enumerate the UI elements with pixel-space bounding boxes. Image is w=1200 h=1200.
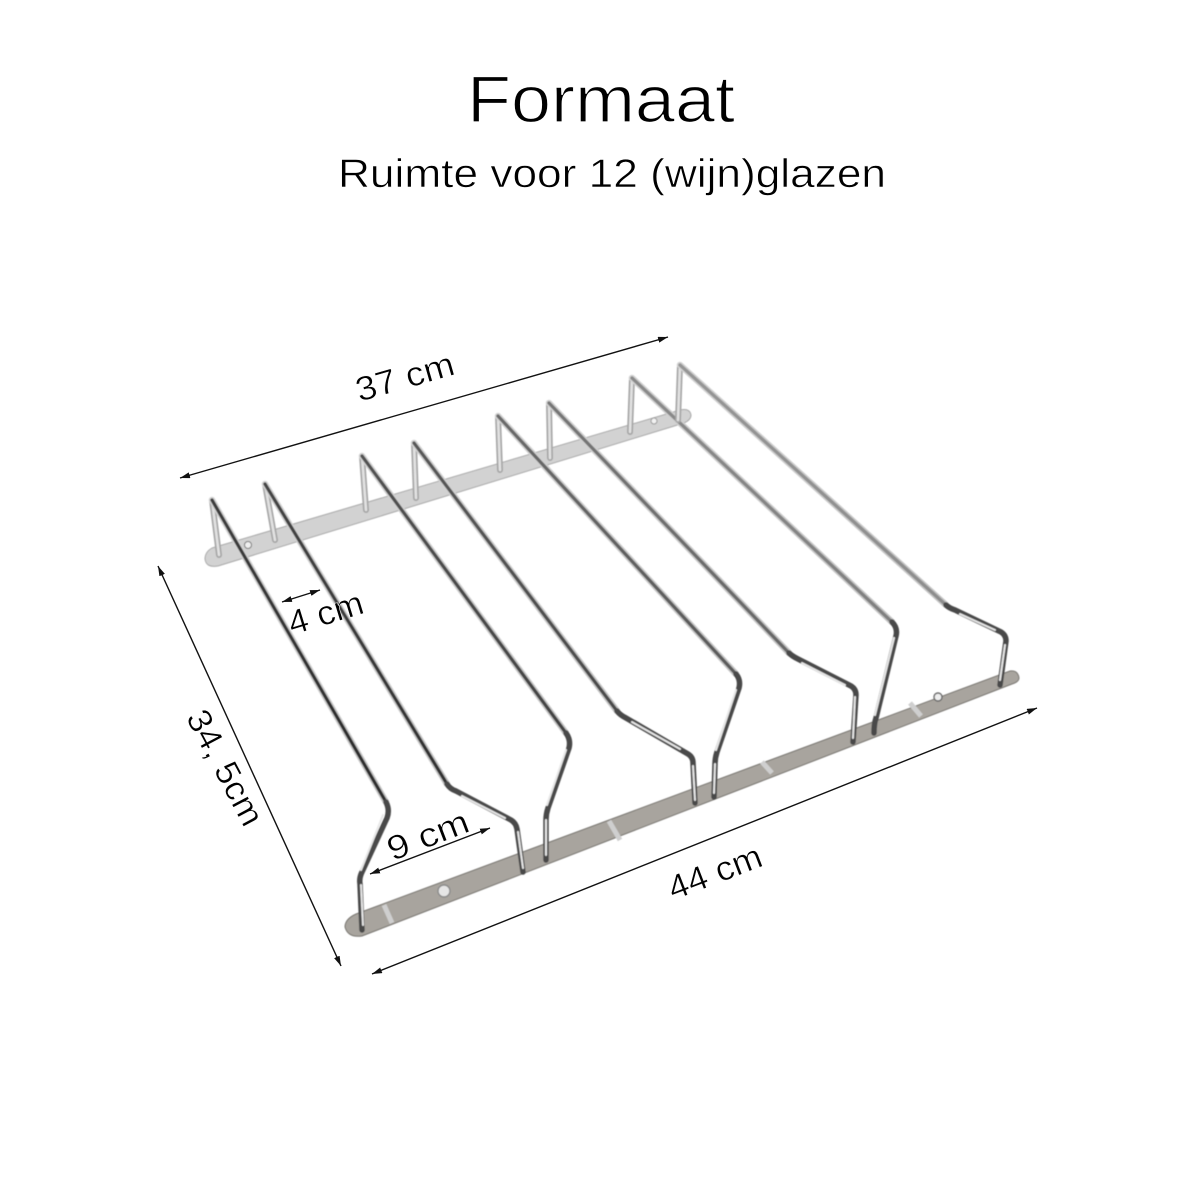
label: 37 cm: 37 cm [351,345,459,410]
front strip screw right [934,693,942,701]
wire 4 [414,443,695,803]
arrow: 34,5 cm [158,566,341,966]
back strip screw [244,542,252,548]
back strip right screw [651,418,657,424]
arrow: 9 cm [370,828,490,874]
product: glass rack [205,365,1019,936]
wire 6 [549,403,856,742]
front mounting strip [345,671,1019,936]
wire 3 [362,456,570,860]
wire 5 [498,416,740,797]
back mounting strip [205,410,691,566]
front strip screw left [438,885,450,897]
wire 8 [678,365,1006,685]
wire 2 [265,484,523,872]
wire 7 [630,378,896,733]
title: Formaat [467,62,735,136]
arrow: 37 cm [180,337,668,478]
front strip clips [384,703,921,923]
wire 1 [212,500,388,930]
arrow: 4 cm [282,590,320,602]
label: 44 cm: 44 cm [663,837,768,908]
label: 34,5 cm: 34, 5cm [178,703,271,832]
arrow: 44 cm [372,708,1037,974]
label: 4 cm: 4 cm [283,584,368,643]
subtitle: Ruimte voor 12 (wijn)glazen [338,152,886,196]
label: 9 cm: 9 cm [382,803,475,869]
